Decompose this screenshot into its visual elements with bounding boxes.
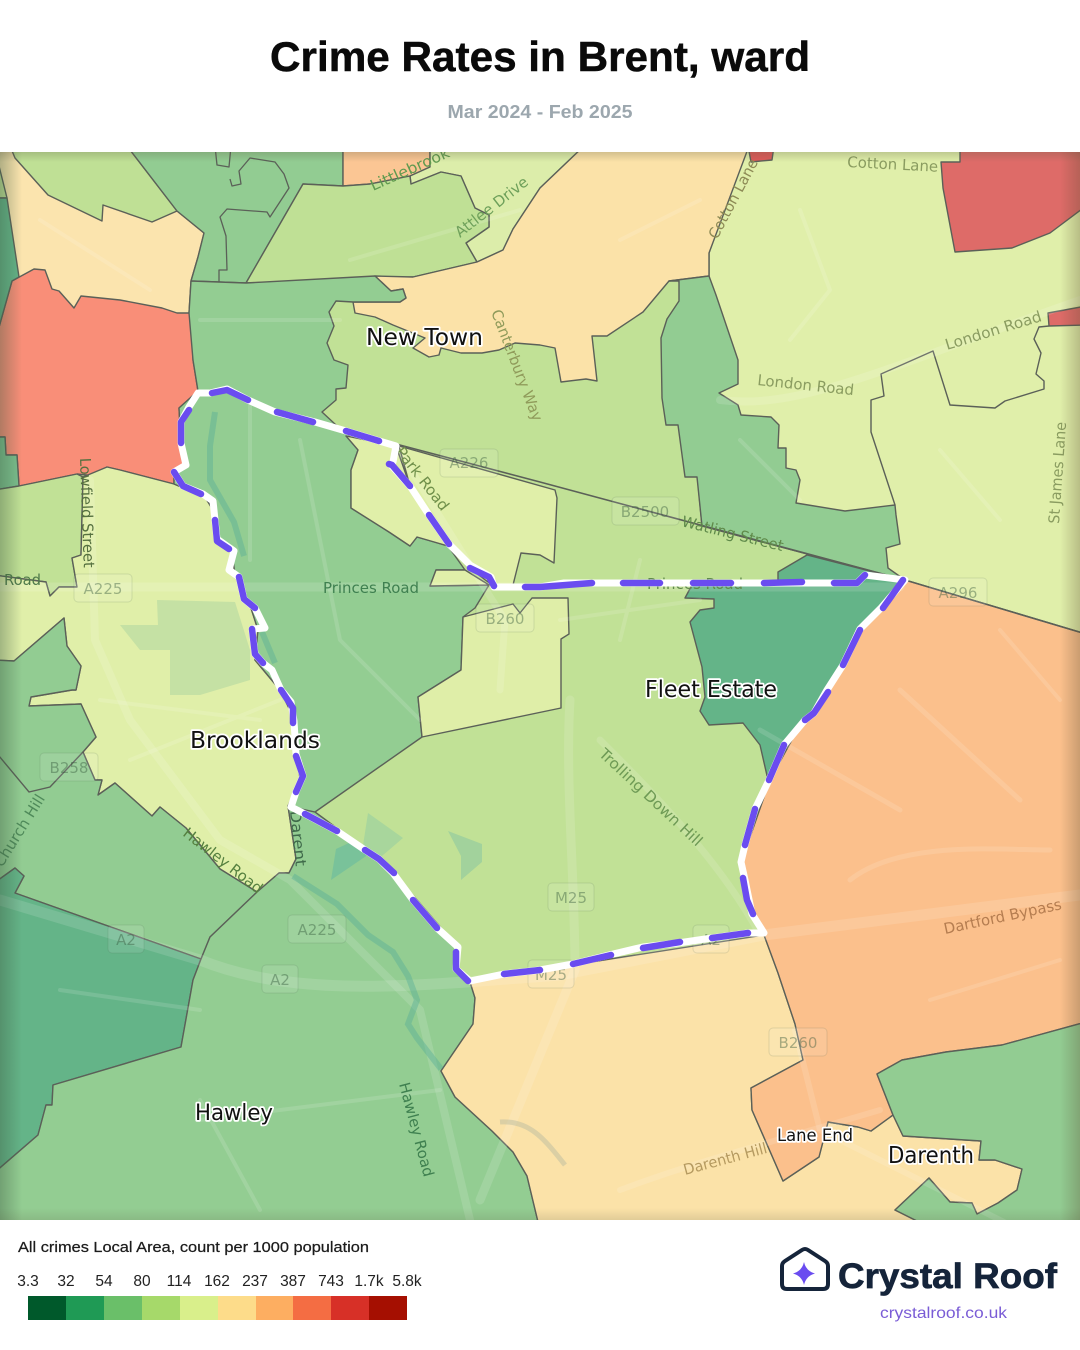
ward: north mid green (127, 146, 343, 283)
ward: left light green (0, 474, 83, 596)
road network (0, 200, 1080, 1230)
street: Princes Road west: Princes Road (323, 579, 419, 597)
shield: A2 east (693, 925, 729, 953)
ward: east mid green strip (661, 276, 905, 580)
ward: yellow-green east of Park Road (399, 446, 557, 585)
ward: west mid green (0, 618, 257, 959)
route: purple dashes (174, 390, 903, 981)
shield: M25 south (528, 960, 574, 988)
shield: B260 south: B260 (779, 1034, 817, 1052)
shield: B260 north (476, 604, 534, 632)
ward: north-east yellow-green (679, 146, 1080, 634)
place: Darenth: Darenth (888, 1143, 974, 1169)
shield: A225 west: A225 (84, 580, 122, 598)
shield: M25 south: M25 (535, 966, 567, 984)
street: London Road east: London Road (943, 307, 1044, 354)
street: Trolling Down Hill: Trolling Down Hill (595, 744, 706, 850)
ward: northern street-block boundary (219, 158, 289, 283)
ward: central-west Brent mid green (174, 389, 489, 812)
shield: M25 north (548, 883, 594, 911)
Watling Street ward line (396, 444, 1080, 634)
shield: B2500 (612, 497, 679, 525)
legend scale values: 387 (280, 1273, 306, 1290)
street: Littlebrook: Littlebrook (367, 144, 453, 195)
map edge shading (0, 152, 1080, 1220)
shield: A225 south (288, 915, 346, 943)
legend scale values: 80 (133, 1273, 151, 1290)
ward: Attlee Drive yellow-green (410, 146, 584, 262)
legend (17, 1239, 422, 1320)
shield: A2 east: A2 (701, 931, 721, 949)
street: Cotton Lane vertical: Cotton Lane (705, 156, 762, 242)
shield: B258: B258 (50, 759, 88, 777)
shield: A2 centre (262, 965, 298, 993)
ward: top centre cream (353, 146, 749, 382)
grey stream (500, 1122, 565, 1165)
shield: A2 centre: A2 (270, 971, 290, 989)
park area (120, 600, 250, 695)
shield: A2 west: A2 (116, 931, 136, 949)
shield: A225 south: A225 (298, 921, 336, 939)
ward: north-west cream (0, 152, 204, 312)
legend colour bar (28, 1296, 407, 1320)
street: Darenth Hill: Darenth Hill (681, 1139, 769, 1179)
street: Darent: Darent (286, 810, 310, 867)
ward: top right red (941, 146, 1080, 252)
shield: A226 (440, 449, 498, 477)
icon: house with star (782, 1249, 828, 1289)
shield: B260 south (769, 1028, 827, 1056)
ward: yellow-green below Princes Road (418, 598, 569, 737)
shield: M25 north: M25 (555, 889, 587, 907)
street: Lowfield Street: Lowfield Street (76, 458, 98, 568)
route: white underlay (174, 389, 905, 981)
place labels (190, 325, 974, 1169)
legend scale values: 162 (204, 1273, 230, 1290)
inner north-east ward boundary (871, 326, 1049, 505)
street: Park Road: Park Road (392, 443, 453, 514)
ward: small red right (1048, 306, 1080, 326)
legend scale values: 3.3 (17, 1273, 39, 1290)
ward: inner boundaries in north mid green (215, 152, 232, 168)
shield: B258 (40, 753, 98, 781)
website url: crystalroof.co.uk (880, 1305, 1008, 1322)
legend scale values: 1.7k (354, 1273, 384, 1290)
place: Brooklands: Brooklands (190, 728, 320, 754)
ward: bottom cream (441, 935, 1022, 1226)
legend scale values (17, 1273, 422, 1290)
ward: small red top (748, 152, 774, 163)
street: Dartford Bypass: Dartford Bypass (942, 895, 1063, 938)
shield: A2 west (108, 925, 144, 953)
legend scale values: 32 (57, 1273, 75, 1290)
street: St James Lane: St James Lane (1045, 421, 1070, 524)
shield: B260 north: B260 (486, 610, 524, 628)
brand logo (782, 1249, 1057, 1322)
shield: A226: A226 (450, 454, 488, 472)
place: Hawley: Hawley (195, 1101, 273, 1126)
ward: salmon high-crime area (0, 269, 198, 486)
ward: left small green (0, 437, 19, 490)
street: Watling Street: Watling Street (680, 512, 785, 555)
legend scale values: 743 (318, 1273, 344, 1290)
ward: Park Road yellow-green triangle (346, 436, 468, 567)
shield: A296 (929, 578, 987, 606)
place: New Town: New Town (366, 325, 483, 351)
ward: mid green north of Brent (189, 276, 406, 431)
street: Attlee Drive: Attlee Drive (451, 173, 532, 241)
legend scale values: 237 (242, 1273, 268, 1290)
shield: A225 west (74, 574, 132, 602)
place: Fleet Estate: Fleet Estate (645, 677, 777, 703)
ward: Hawley (0, 806, 539, 1226)
ward: Fleet Estate dark green (685, 555, 905, 780)
ward: south-west dark green (0, 868, 201, 1173)
legend scale values: 114 (167, 1273, 192, 1290)
street: Hawley Road east: Hawley Road (395, 1080, 438, 1179)
ward: north light green (10, 146, 177, 222)
street: Road fragment: Road (4, 571, 41, 589)
ward: south-east mid green (877, 1022, 1080, 1226)
street: Canterbury Way: Canterbury Way (487, 307, 546, 424)
legend scale values: 54 (95, 1273, 113, 1290)
ward: east peach (742, 580, 1080, 1181)
road shields (40, 449, 987, 1056)
place: Lane End: Lane End (777, 1126, 853, 1146)
ward: far-left dark green strip (0, 198, 19, 345)
shield: A296: A296 (939, 584, 977, 602)
ward: top peach (342, 152, 430, 186)
ward: north centre light green (246, 172, 489, 283)
shield: B2500: B2500 (621, 503, 669, 521)
river (210, 412, 441, 1069)
subtitle: date range: Mar 2024 - Feb 2025 (448, 102, 632, 122)
legend title: All crimes Local Area, count per 1000 population (18, 1239, 369, 1256)
title: Crime Rates in Brent, ward (270, 33, 810, 80)
legend scale values: 5.8k (392, 1273, 422, 1290)
street: London Road west: London Road (757, 371, 855, 399)
street: Princes Road east: Princes Road (647, 575, 743, 593)
wordmark: Crystal Roof (838, 1257, 1057, 1296)
ward: Brooklands (0, 467, 300, 892)
ward: yellow-green notch at Princes Road (430, 570, 489, 586)
Brent ward boundary route (174, 389, 905, 981)
street names (0, 144, 1070, 1179)
street: Cotton Lane horizontal: Cotton Lane (847, 153, 939, 176)
lakes (331, 813, 482, 880)
west ward boundary (0, 750, 83, 792)
street: Hawley Road west: Hawley Road (180, 824, 266, 897)
